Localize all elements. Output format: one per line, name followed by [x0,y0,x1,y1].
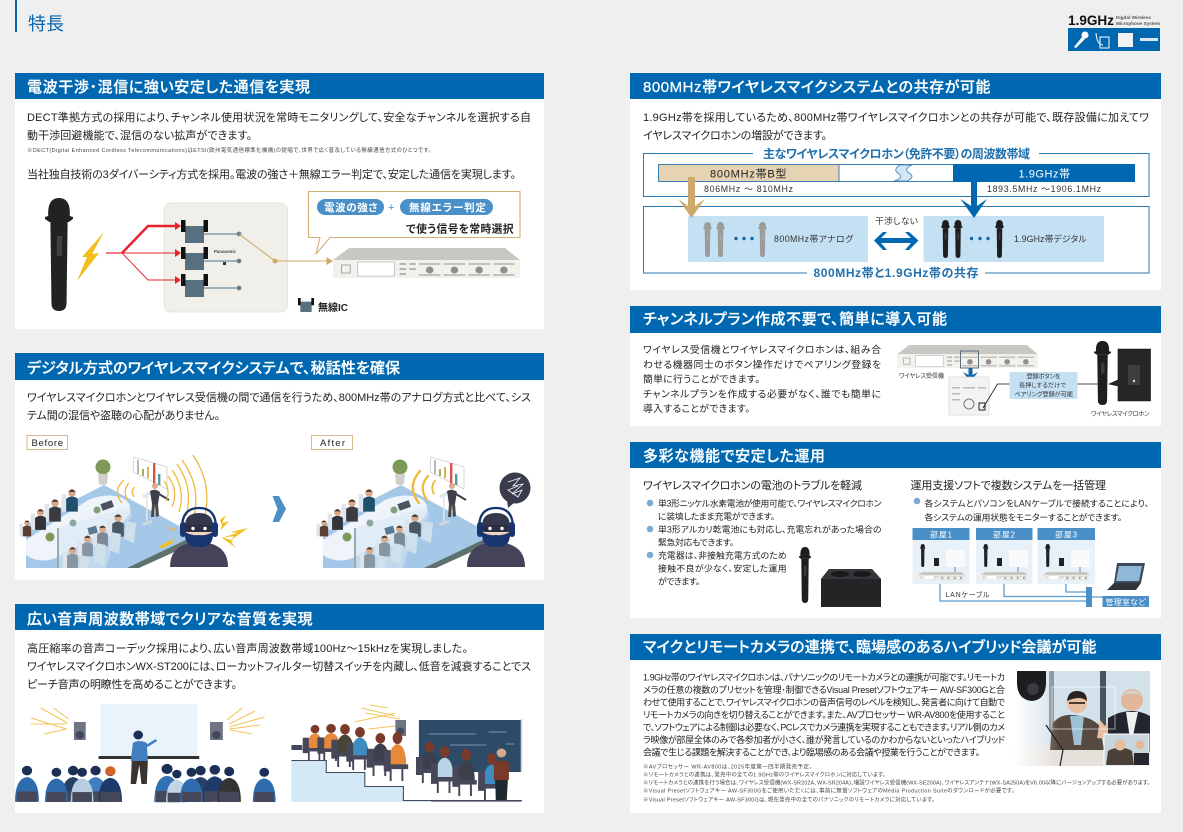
coexistence diagram: 干渉しない [875,215,919,226]
panel: チャンネルプラン作成不要 [630,306,1161,426]
LAN cables [940,584,1103,607]
callout: signal selection: 電波の強さ [324,201,378,214]
callout: signal selection: + [388,202,394,214]
battery features: 接触不良が少なく、安定した運用 [658,562,786,574]
footnotes: ※Visual Presetソフトウェアキー AW-SF300Gは、現在発売中の全てのパナソニックのリモートカメラに対応しています。 [643,796,934,804]
panel: マイクとリモートカメラの連携 [630,634,1161,813]
heading: 広い音声周波数帯域でクリアな音質を実現 [27,610,312,628]
text block: リモートカメラの向きを切り替えることができます。また、AVプロセッサー WR-AV800を使用すること [643,709,1005,720]
text block: テム間の混信や盗聴の心配がありません。 [27,408,220,422]
heading [630,442,1161,468]
room 3: 部屋3 [1055,530,1077,540]
illustration: after, encrypted [316,457,530,568]
icon: laptop [1107,563,1145,590]
management software: 各システムとパソコンをLANケーブルで接続することにより、 [924,498,1149,508]
page heading: 特長 [15,0,64,34]
arrow: interference-free double arrow [874,232,918,250]
footnotes [643,762,1150,804]
network diagram [912,528,1149,607]
label: Before: Before [32,438,63,449]
wireless receiver [333,248,520,278]
text block: ワイヤレスマイクロホンWX-ST200には、ローカットフィルター切替スイッチを内蔵し、低音を減衰することでス [27,659,531,673]
frequency band diagram: 800MHz帯B型 [710,166,786,180]
frequency band diagram: 1.9GHz帯 [1018,168,1070,180]
text block [643,343,881,415]
heading: 電波干渉･混信に強い安定した通信を実現 [27,79,310,96]
text block: で、ソフトウェアによる制御は必要なく、PCレスでカメラ連携を実現することもできます。リアル側のカメ [643,722,1005,732]
heading: チャンネルプラン作成不要で、簡単に導入可能 [643,310,947,328]
pairing diagram [897,341,1150,418]
heading: 800MHz帯ワイヤレスマイクシステムとの共存が可能 [643,78,990,96]
arrow: zoom to panel detail [963,368,978,382]
battery features: ワイヤレスマイクロホンの電池のトラブルを軽減 [643,478,862,492]
network diagram: 管理室など [1106,597,1146,607]
text block [27,110,531,181]
coexistence diagram: 1.9GHz帯デジタル [1014,233,1087,244]
text block: チャンネルプランを作成する必要がなく、誰でも簡単に [643,388,881,400]
logo: 1.9GHz digital wireless microphone system: 1.9GHz [1068,12,1114,28]
battery features: に装填したまま充電ができます。 [658,510,775,522]
legend: wireless IC: 無線IC [318,301,348,314]
heading [15,353,544,380]
panel: 800MHz帯との共存 [630,73,1161,290]
pairing diagram: ワイヤレス受信機 [899,372,944,380]
arrow: 1.9GHz band [960,182,987,218]
text block [27,390,531,422]
footnotes: ※AVプロセッサー WR-AV800は、2025年度第一四半期発売予定。 [643,762,812,770]
icon: scrambled speech bubble [500,472,530,508]
battery features: 単3形アルカリ乾電池にも対応し、充電忘れがあった場合の [658,524,882,534]
coexistence diagram [644,206,1149,280]
text block: ピーチ音声の明瞭性を高めることができます。 [27,677,237,691]
text block: 1.9GHz帯のワイヤレスマイクロホンは、パナソニックのリモートカメラとの連携が可能です。リモートカ [643,672,1005,682]
icon: lightning bolt [77,232,104,281]
battery features: 充電器は、非接触充電方式のため [658,550,786,560]
arrow: 800MHz band [678,177,705,218]
illustration: before, eavesdropping [20,455,248,568]
room 1: 部屋1 [930,530,952,540]
photo: hybrid meeting with remote camera [1014,671,1150,766]
battery features: 単3形ニッケル水素電池が使用可能で、ワイヤレスマイクロホン [658,498,882,508]
text block [643,672,1005,758]
text block: ワイヤレス受信機とワイヤレスマイクロホンは、組み合 [643,343,881,356]
arrow: selected signal to receiver [239,234,332,264]
frequency band diagram: 1893.5MHz ～1906.1MHz [987,184,1101,194]
pairing diagram: ワイヤレスマイクロホン [1091,411,1150,418]
footnotes: ※リモートカメラとの連携を行う場合は、ワイヤレス受信機(WX-SR202A、WX-SR204A)、増設ワイヤレス受信機(WX-SE200A)、ワイヤレスアンテナ(WX-SA250A)をV6.00以降にバージョンアップする必要があります。 [643,778,1150,786]
room 3 [1038,528,1095,584]
callout: signal selection: で使う信号を常時選択 [406,222,514,236]
frequency band diagram: 806MHz ～ 810MHz [704,184,793,194]
network diagram: LANケーブル [946,590,990,599]
pairing diagram: 登録ボタンを [1026,372,1061,380]
logo: 1.9GHz digital wireless microphone system: Microphone System [1116,21,1160,27]
heading [15,604,544,630]
text block: メラの任意の複数のプリセットを管理･制御できるVisual Presetソフトウェアキー AW-SF300Gと合 [643,684,1005,695]
text block: 導入することができます。 [643,402,750,415]
callout: signal selection [308,192,520,254]
panel: 多彩な機能で安定した運用 [630,442,1161,618]
management software [910,478,1149,522]
panel: デジタル方式で秘話性を確保 [15,353,544,580]
text block [27,641,531,691]
footnotes: ※リモートカメラとの連携は、発売中の全ての1.9GHz帯のワイヤレスマイクロホンに対応しています。 [643,770,886,778]
illustration: lecture hall [15,704,276,802]
panel: 電波干渉・混信に強い安定した通信を実現 [15,73,544,329]
illustration: classroom [291,705,522,802]
arrow: before to after [272,496,286,522]
heading: 多彩な機能で安定した運用 [643,447,825,465]
logo: 1.9GHz digital wireless microphone system [1068,12,1160,51]
icon: wireless microphone [45,198,73,311]
room 1 [912,528,970,584]
text block: わせて使用することで、ワイヤレスマイクロホンの音声信号のレベルを検知し、発言者に向けて自動で [643,696,1005,708]
callout: signal selection: 無線エラー判定 [409,201,486,214]
diversity antenna unit [164,203,288,312]
text block: わせる機器同士のボタン操作だけでペアリング登録を [643,358,881,371]
coexistence diagram: 800MHz帯と1.9GHz帯の共存 [814,265,978,280]
text block: 会議で生じる課題を解決することができ、より臨場感のある会議や授業を行うことができます。 [643,746,980,758]
management software: 運用支援ソフトで複数システムを一括管理 [910,478,1106,492]
label: After [312,436,352,450]
logo: 1.9GHz digital wireless microphone system: Digital Wireless [1116,15,1151,21]
heading: デジタル方式のワイヤレスマイクシステムで、秘話性を確保 [27,359,400,377]
heading [15,73,544,99]
text block: DECT準拠方式の採用により、チャンネル使用状況を常時モニタリングして、安全なチャンネルを選択する自 [27,110,531,124]
text block: 高圧縮率の音声コーデック採用により、広い音声周波数帯域100Hz～15kHzを実現しました。 [27,641,468,655]
page heading: 特長: 特長 [28,14,64,34]
text block: イヤレスマイクロホンの増設ができます。 [643,128,827,142]
text block: ワイヤレスマイクロホンとワイヤレス受信機の間で通信を行うため、800MHz帯のアナログ方式と比べて、シス [27,390,531,404]
text block: 動干渉回避機能で、混信のない拡声ができます。 [27,128,252,142]
legend: wireless IC [298,298,348,314]
panel: 広い音声周波数帯域でクリアな音質を実現 [15,604,544,813]
heading [630,634,1161,660]
diversity antenna unit: Panasonic [214,249,236,254]
heading [630,306,1161,333]
room 2: 部屋2 [993,530,1015,540]
text block: 1.9GHz帯を採用しているため、800MHz帯ワイヤレスマイクロホンとの共存が可能で、既存設備に加えてワ [643,110,1149,124]
text block: 簡単に行うことができます。 [643,372,760,386]
battery features: 緊急対応もできます。 [658,536,734,548]
pairing diagram: ペアリング登録が可能 [1014,390,1073,398]
management software: 各システムの運用状態をモニターすることができます。 [924,512,1122,522]
battery features: ができます。 [658,576,700,586]
arrows: radio signal paths [106,222,181,284]
label: After: After [320,438,345,449]
heading [630,73,1161,99]
coexistence diagram: 800MHz帯アナログ [774,233,854,244]
text block: ※DECT(Digital Enhanced Cordless Telecommunications)はETSI(欧州電気通信標準化機構)の提唱で、世界で広く普及している無線通信方式のひとつです。 [27,146,431,154]
text block [643,110,1149,142]
heading: マイクとリモートカメラの連携で、臨場感のあるハイブリッド会議が可能 [643,638,1096,656]
label: Before [27,436,68,450]
frequency band diagram [644,146,1149,196]
frequency band diagram: 主なワイヤレスマイクロホン（免許不要）の周波数帯域 [763,146,1030,161]
room 2 [976,528,1032,584]
text block: ラ映像が部屋全体のみで各参加者が小さく、誰が発言しているのかわからないといったハイブリッド [643,734,1005,745]
battery features [643,478,882,586]
microphone and charger [799,547,881,607]
pairing diagram: 長押しするだけで [1019,382,1066,390]
footnotes: ※Visual Presetソフトウェアキー AW-SF300Gをご使用いただくには、事前に無償ソフトウェアのMedia Production Suiteのダウンロードが必要です。 [643,786,1014,794]
text block: 当社独自技術の3ダイバーシティ方式を採用。電波の強さ＋無線エラー判定で、安定した通信を実現します。 [27,167,516,181]
